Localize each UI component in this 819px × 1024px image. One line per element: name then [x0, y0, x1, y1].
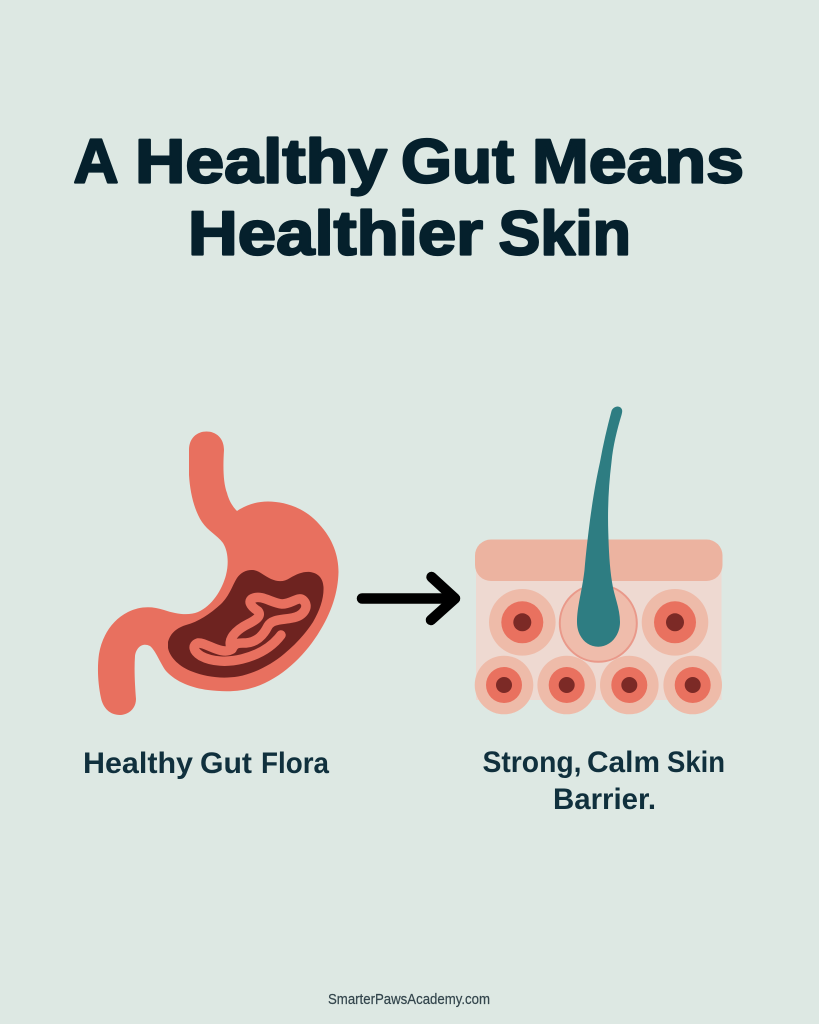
icon: stomach with healthy gut flora: [98, 432, 339, 715]
lower skin layer: [476, 570, 722, 700]
title: Healthier: [188, 200, 483, 268]
title: Gut: [401, 128, 514, 196]
arrow: [362, 577, 455, 620]
lower row cell 3: [600, 656, 659, 714]
title: Means: [532, 128, 744, 196]
lower row cell 4: [663, 656, 722, 714]
top skin barrier band: [475, 540, 722, 581]
upper row cell right: [642, 589, 708, 656]
hair follicle: [560, 585, 637, 662]
lower row cell 1: [475, 656, 533, 714]
footer website: SmarterPawsAcademy.com: [328, 992, 490, 1008]
label: strong calm skin barrier: [482, 746, 725, 816]
title: Skin: [498, 200, 631, 268]
upper row cell left: [489, 589, 556, 656]
label: strong calm skin barrier: Skin: [667, 746, 725, 779]
icon: skin cross-section with hair: [475, 407, 722, 714]
title: Healthy: [135, 128, 388, 196]
label: healthy gut flora: [83, 747, 329, 780]
dark inner lining: [168, 570, 324, 678]
title: [74, 128, 744, 268]
lower row cell 2: [537, 656, 596, 714]
label: healthy gut flora: Gut: [200, 747, 252, 780]
label: strong calm skin barrier: Strong,: [482, 746, 582, 779]
label: healthy gut flora: Flora: [261, 747, 329, 780]
stomach body: [98, 432, 339, 715]
hair shaft and bulb: [577, 407, 622, 647]
intestinal flora folds: [194, 597, 306, 661]
label: strong calm skin barrier: Barrier.: [553, 783, 656, 816]
label: healthy gut flora: Healthy: [83, 747, 193, 780]
label: strong calm skin barrier: Calm: [587, 746, 660, 779]
title: A: [74, 128, 118, 196]
